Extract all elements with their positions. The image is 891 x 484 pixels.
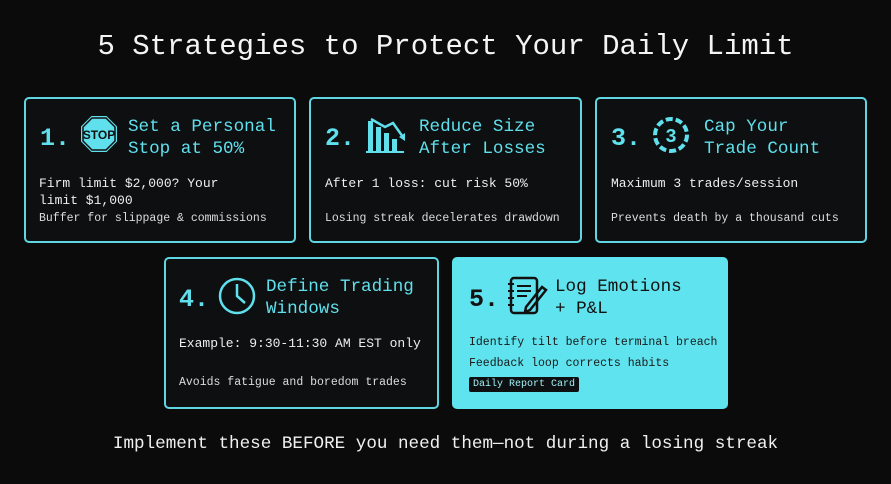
number 2: 2. <box>325 124 355 153</box>
icon: counter circle: 3 <box>665 126 677 148</box>
heading <box>419 117 546 159</box>
panel: strategy 1: Buffer for slippage & commissions <box>39 212 267 225</box>
number 5: 5. <box>469 285 499 314</box>
badge <box>469 377 579 392</box>
text: After 1 loss: cut risk 50% <box>325 176 528 191</box>
text: Identify tilt before terminal breach <box>469 336 717 349</box>
heading: Trade Count <box>704 139 820 159</box>
heading <box>266 277 414 319</box>
title: 5 Strategies to Protect Your Daily Limit <box>97 30 794 63</box>
number 3: 3. <box>611 124 641 153</box>
panel: strategy 2 <box>309 97 582 243</box>
icon: declining bars <box>366 118 405 153</box>
footer callout: Implement these BEFORE you need them—not during a losing streak <box>113 434 778 454</box>
panel: strategy 4 <box>164 257 439 409</box>
text: Maximum 3 trades/session <box>611 176 798 191</box>
heading: Log Emotions <box>555 277 682 297</box>
icon: counter circle <box>653 117 689 153</box>
heading: Define Trading <box>266 277 414 297</box>
panel: strategy 3 <box>595 97 867 243</box>
heading: Reduce Size <box>419 117 535 137</box>
heading: Cap Your <box>704 117 788 137</box>
text: limit $1,000 <box>39 193 133 208</box>
heading: Stop at 50% <box>128 139 244 159</box>
text: Example: 9:30-11:30 AM EST only <box>179 336 421 351</box>
panel: strategy 1 <box>24 97 296 243</box>
heading: Set a Personal <box>128 117 276 137</box>
text: Firm limit $2,000? Your <box>39 176 218 191</box>
heading <box>128 117 276 159</box>
heading: Windows <box>266 299 340 319</box>
text <box>39 176 218 208</box>
heading: + P&L <box>555 299 608 319</box>
panel: strategy 2: Losing streak decelerates drawdown <box>325 212 560 225</box>
panel: strategy 5 (highlighted): Feedback loop corrects habits <box>469 357 669 370</box>
icon: stop sign <box>81 116 117 152</box>
number 4: 4. <box>179 285 209 314</box>
panel: strategy 5 (highlighted) <box>452 257 728 409</box>
heading <box>555 277 682 319</box>
heading: After Losses <box>419 139 546 159</box>
icon: notebook with pencil <box>508 276 548 314</box>
badge: Daily Report Card <box>473 379 575 390</box>
icon: clock <box>218 278 256 314</box>
icon: stop sign: STOP <box>83 128 115 142</box>
number 1: 1. <box>40 124 70 153</box>
panel: strategy 4: Avoids fatigue and boredom trades <box>179 376 407 389</box>
heading <box>704 117 820 159</box>
panel: strategy 3: Prevents death by a thousand cuts <box>611 212 839 225</box>
